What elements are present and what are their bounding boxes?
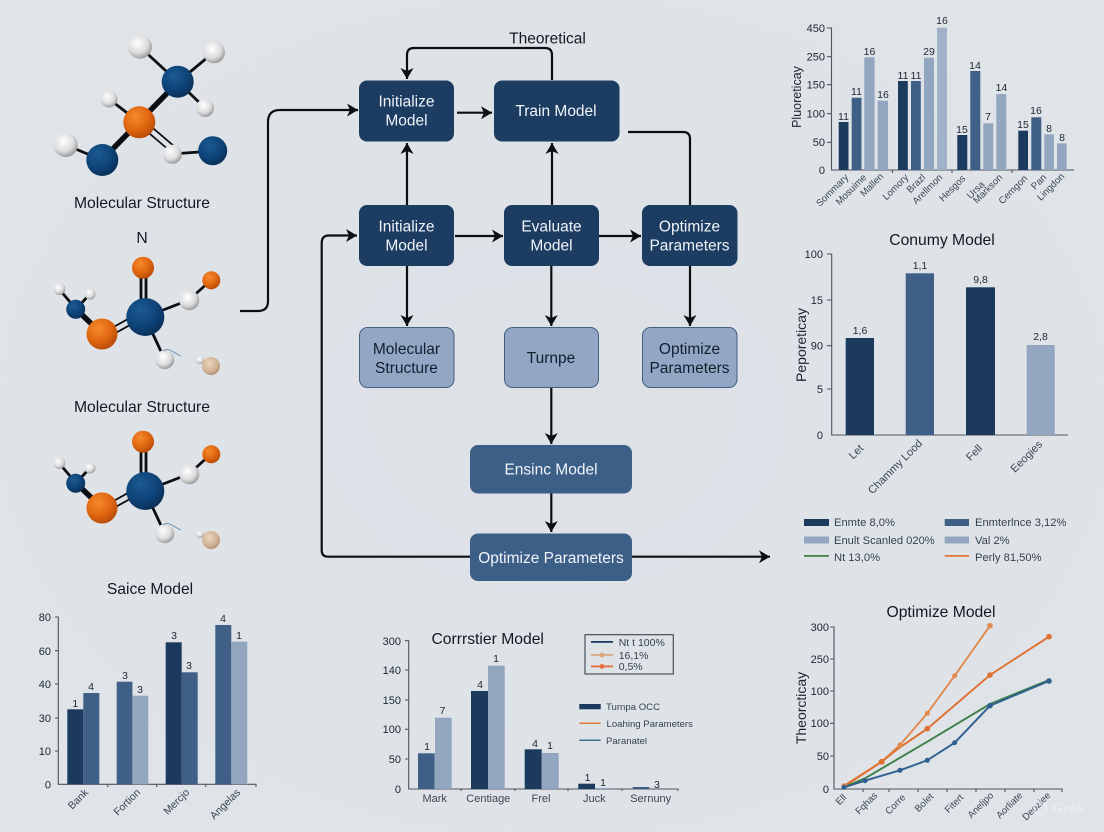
chart title: Corrrstier Model	[431, 631, 544, 648]
category labels: Sommary	[814, 172, 851, 209]
value labels: 8	[1059, 132, 1065, 144]
legend: conumy model: Enmte 8,0%	[834, 517, 895, 529]
axis numbers	[805, 249, 823, 442]
axis numbers: 10	[39, 746, 51, 758]
axis numbers: 40	[39, 679, 51, 691]
value labels	[838, 15, 1065, 144]
value labels: 14	[996, 82, 1007, 94]
arrow: molecules to initialize model	[240, 110, 358, 311]
axis numbers: 50	[813, 137, 825, 149]
bars	[418, 666, 649, 789]
value labels: 1	[72, 698, 78, 710]
axis numbers	[39, 612, 51, 792]
icon: molecule 2	[53, 257, 220, 375]
value labels: 16	[1030, 105, 1042, 117]
box: train model	[494, 80, 620, 142]
value labels: 11	[851, 86, 862, 98]
box: ensinc model: Ensinc Model	[504, 462, 598, 478]
axis numbers: 250	[807, 52, 825, 64]
value labels: 11	[838, 111, 849, 123]
box: molecular structure: Molecular	[373, 341, 440, 358]
value labels	[424, 653, 660, 791]
category labels: Lomory	[881, 172, 911, 203]
axis numbers: 300	[811, 622, 829, 634]
value labels: 3	[137, 684, 143, 696]
value labels: 3	[186, 660, 192, 672]
value labels: 16	[877, 89, 889, 101]
category labels: Deoziee	[1020, 790, 1053, 823]
value labels: 7	[985, 111, 991, 123]
box: initialize model 2: Initialize	[378, 218, 434, 236]
axis numbers: 100	[807, 108, 825, 120]
legend: conumy model: Enmterlnce 3,12%	[975, 517, 1066, 529]
axis numbers: 60	[39, 646, 51, 658]
value labels: 11	[911, 70, 922, 82]
value labels: 1	[585, 772, 591, 784]
category labels: Aneljpo	[966, 790, 996, 821]
arrow: train model to optimize parameters	[628, 132, 690, 205]
legend: corrrstier secondary	[579, 702, 693, 747]
category labels: Eeogies	[1009, 438, 1045, 475]
box: optimize parameters light: Optimize	[659, 341, 720, 358]
chart: conumy model bars	[793, 232, 1068, 497]
chart title: Optimize Model	[887, 604, 995, 621]
value labels: 1	[493, 653, 499, 665]
arrow: initialize to molecular structure	[406, 266, 408, 326]
category labels: Mark	[422, 793, 447, 805]
box: molecular structure: Structure	[375, 360, 438, 377]
arrow: ensinc to optimize	[550, 493, 552, 532]
value labels: 1,1	[913, 260, 927, 272]
value labels: 3	[171, 630, 177, 642]
box: evaluate model: Model	[530, 238, 573, 254]
value labels: 4	[477, 679, 483, 691]
category labels	[814, 171, 1067, 209]
legend: corrrstier secondary: Paranatel	[606, 736, 647, 747]
value labels: 1	[424, 741, 430, 753]
category labels	[66, 786, 243, 822]
category labels: Sernuny	[630, 793, 672, 805]
value labels: 16	[936, 15, 948, 27]
category labels: Chammy Lood	[866, 438, 925, 497]
box: initialize model 1: Model	[385, 112, 428, 130]
axis numbers: 450	[807, 23, 825, 35]
legend: corrrstier box	[585, 635, 673, 674]
axis numbers: 5	[817, 384, 823, 396]
legend: conumy model	[804, 517, 1066, 564]
category labels: Cemgon	[997, 173, 1030, 207]
legend: corrrstier box: 16,1%	[619, 650, 648, 662]
value labels: 15	[1017, 119, 1029, 131]
axis numbers: 50	[817, 751, 829, 763]
axis numbers: 0	[823, 784, 829, 796]
value labels: 3	[122, 670, 128, 682]
value labels: 1	[547, 740, 553, 752]
value labels: 4	[220, 613, 226, 625]
heading: molecular structure 2: Molecular Structure	[74, 399, 210, 416]
category labels: Ursa	[965, 179, 988, 201]
box: initialize model 1: Initialize	[378, 94, 434, 110]
box: molecular structure	[360, 328, 454, 388]
box: initialize model 2	[359, 205, 454, 266]
value labels: 11	[898, 70, 909, 82]
axis numbers: 150	[383, 695, 401, 707]
arrow: initialize to train	[457, 112, 492, 114]
value labels: 8	[1046, 123, 1052, 135]
arrow: evaluate up	[551, 143, 553, 205]
heading: N: N	[136, 230, 148, 247]
category labels: Markson	[971, 172, 1005, 206]
category labels: Corre	[883, 792, 908, 817]
chart: saice model bars	[39, 581, 256, 822]
value labels: 1	[600, 777, 606, 789]
legend: conumy model: Perly 81,50%	[975, 552, 1042, 564]
value labels: 7	[440, 705, 446, 717]
arrow: train model feedback to initialize model	[407, 48, 552, 80]
category labels: Brazl	[905, 172, 928, 196]
axis numbers: 100	[805, 249, 823, 261]
box: optimize parameters light: Parameters	[649, 360, 730, 377]
arrow: initialize up	[406, 143, 408, 205]
category labels: Fitert	[943, 792, 966, 816]
box: initialize model 1	[359, 80, 454, 142]
watermark: grok	[1034, 800, 1085, 816]
category labels: Fell	[964, 443, 985, 464]
legend: corrrstier box: 0,5%	[619, 661, 643, 673]
category labels: Angelas	[208, 787, 243, 822]
legend: conumy model: Val 2%	[975, 535, 1010, 547]
legend: corrrstier box: Nt t 100%	[619, 637, 665, 649]
axis numbers: 90	[811, 340, 823, 352]
chart title: Conumy Model	[889, 232, 995, 249]
axis numbers: 80	[39, 612, 51, 624]
axis numbers	[811, 622, 829, 796]
axis numbers: 100	[811, 718, 829, 730]
line markers	[842, 623, 1052, 790]
axis numbers: 250	[811, 654, 829, 666]
axis numbers: 0	[395, 784, 401, 796]
chart: optimize model lines	[793, 604, 1062, 823]
bars	[846, 273, 1055, 435]
axis numbers: 15	[811, 295, 823, 307]
category labels: Fortion	[112, 787, 143, 818]
value labels: 4	[88, 681, 94, 693]
axis numbers: 50	[389, 754, 401, 766]
value labels: 9,8	[973, 274, 988, 286]
value labels: 29	[923, 46, 935, 58]
value labels: 16	[864, 46, 875, 58]
value labels: 15	[956, 124, 968, 136]
category labels: Centiage	[466, 793, 510, 805]
box: optimize parameters wide: Optimize Parameters	[478, 550, 624, 567]
category labels: Fqhas	[853, 790, 880, 817]
box: initialize model 2: Model	[385, 238, 428, 254]
category labels: Ell	[834, 792, 849, 808]
arrow: turnpe to ensinc	[550, 388, 552, 444]
bars	[839, 28, 1067, 170]
arrow: optimize down	[689, 266, 691, 326]
value labels	[853, 260, 1048, 343]
value labels: 4	[532, 738, 538, 750]
axis numbers: 30	[39, 713, 51, 725]
value labels: 2,8	[1033, 331, 1048, 343]
axis numbers: 0	[819, 165, 825, 177]
line series	[844, 626, 1049, 787]
box: optimize parameters: Optimize	[659, 218, 720, 236]
box: optimize parameters light	[642, 328, 737, 388]
category labels: Arellmon	[911, 172, 945, 207]
axis title: Pluoreticay	[790, 65, 804, 128]
axis numbers: 100	[383, 724, 401, 736]
box: optimize parameters wide	[470, 534, 632, 581]
category labels	[422, 793, 672, 805]
axis numbers: 100	[811, 686, 829, 698]
legend: conumy model: Nt 13,0%	[834, 552, 880, 564]
category labels: Pan	[1029, 172, 1049, 192]
value labels: 1	[236, 630, 242, 642]
bars	[67, 625, 247, 784]
heading: molecular structure 1: Molecular Structure	[74, 195, 210, 212]
axis numbers: 300	[383, 636, 401, 648]
chart: top right grouped bars	[790, 15, 1074, 209]
axis numbers	[383, 636, 401, 796]
category labels: Mercjo	[161, 787, 192, 817]
label: theoretical: Theoretical	[509, 30, 586, 48]
box: optimize parameters: Parameters	[649, 238, 730, 254]
chart title: Saice Model	[107, 581, 193, 598]
category labels: Hesgos	[937, 173, 968, 204]
box: turnpe	[504, 328, 598, 388]
box: evaluate model: Evaluate	[521, 218, 582, 236]
category labels	[834, 790, 1053, 823]
arrow: evaluate to optimize	[599, 235, 641, 237]
axis title: Peporeticay	[793, 308, 809, 382]
axis title: Theorcticay	[793, 672, 809, 744]
category labels: Mallen	[858, 171, 886, 199]
legend: conumy model: Enult Scanled 020%	[834, 535, 935, 547]
arrow: evaluate to turnpe	[550, 266, 552, 326]
axis numbers: 140	[383, 665, 401, 677]
legend: corrrstier secondary: Loahing Parameters	[606, 719, 693, 730]
arrow: feedback loop to initialize model	[322, 236, 470, 557]
category labels: Let	[847, 443, 866, 462]
box: evaluate model	[504, 205, 599, 266]
watermark: grok: Grok	[1052, 800, 1085, 816]
category labels: Lingdon	[1035, 171, 1067, 203]
category labels: Aorliate	[994, 790, 1025, 821]
value labels	[72, 613, 242, 710]
category labels: Juck	[583, 793, 606, 805]
axis numbers: 150	[807, 80, 825, 92]
icon: molecule 1	[54, 35, 227, 176]
legend: corrrstier secondary: Turnpa OCC	[606, 702, 660, 713]
value labels: 1,6	[853, 325, 867, 337]
value labels: 3	[654, 779, 660, 791]
axis numbers	[807, 23, 825, 177]
category labels	[847, 438, 1045, 497]
axis numbers: 0	[817, 430, 823, 442]
icon: molecule 3	[53, 431, 220, 549]
value labels: 14	[969, 60, 981, 72]
category labels: Mosuime	[834, 172, 869, 208]
axis numbers: 0	[45, 780, 51, 792]
box: turnpe: Turnpe	[527, 350, 575, 367]
chart: corrrstier model bars	[383, 631, 678, 805]
arrow: output right	[632, 556, 770, 558]
box: optimize parameters	[642, 205, 738, 266]
category labels: Bank	[66, 786, 92, 812]
arrow: initialize to evaluate	[455, 235, 503, 237]
category labels: Frel	[532, 793, 550, 805]
category labels: Bolet	[913, 791, 936, 815]
box: train model: Train Model	[515, 103, 597, 120]
box: ensinc model	[470, 445, 632, 494]
